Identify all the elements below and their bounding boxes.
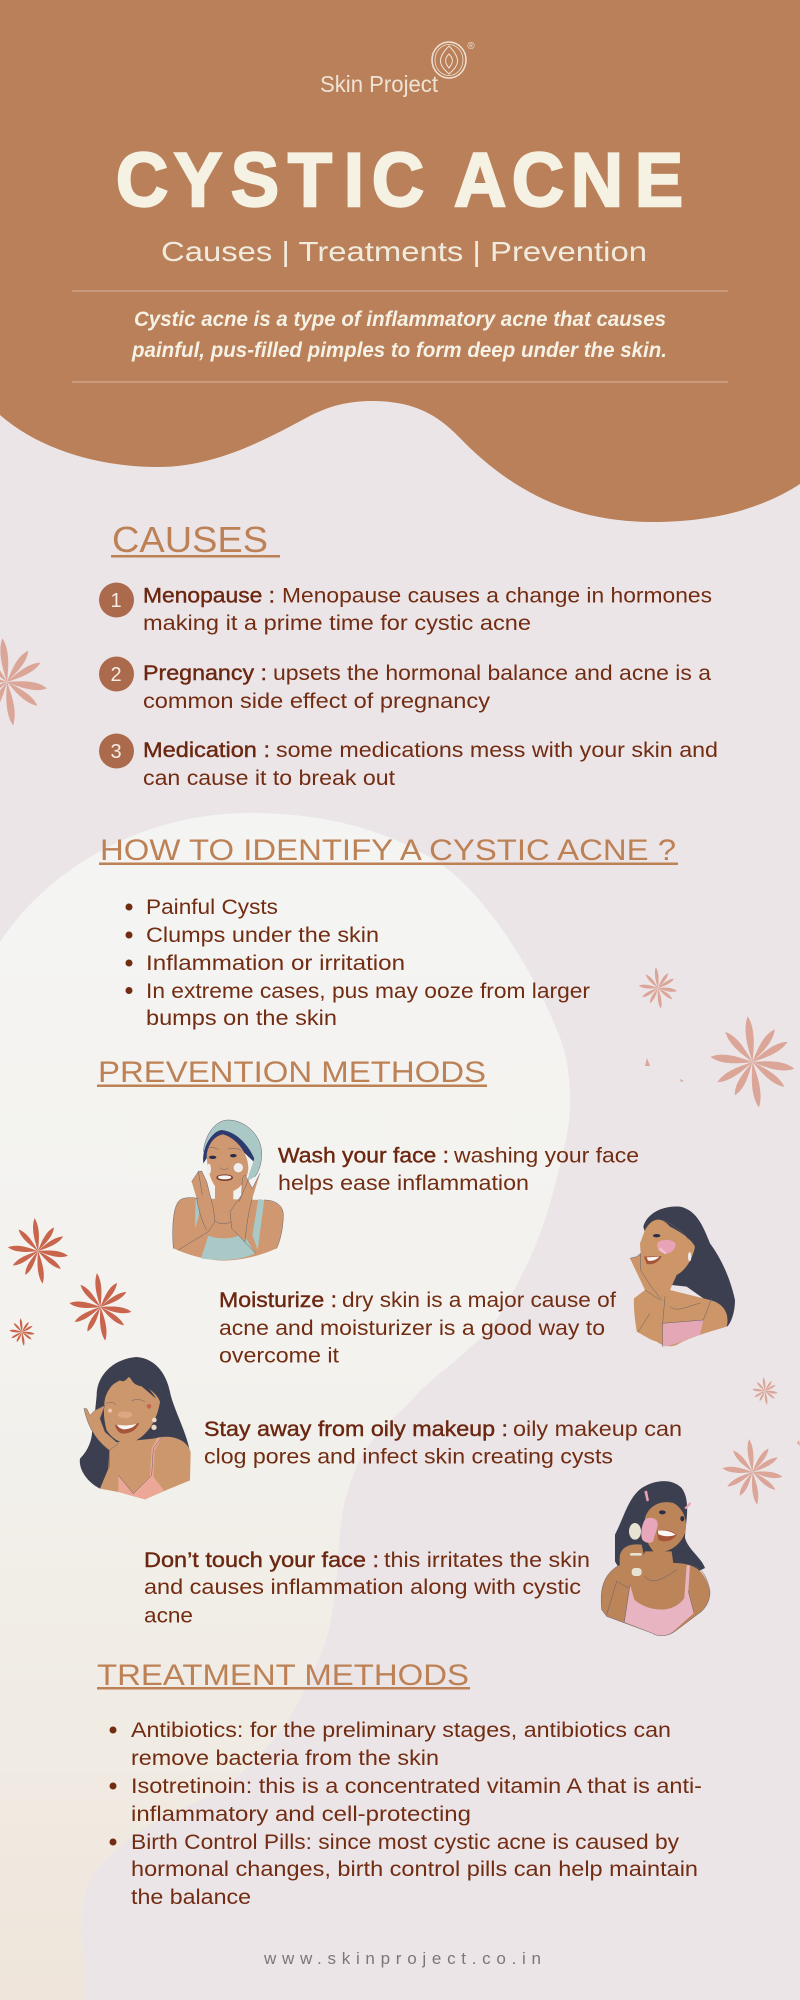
footer website: www.skinproject.co.in [263,1949,541,1968]
moisturize text: dry skin is a major cause of [342,1289,616,1312]
logo: Skin Project: Skin Project [320,71,439,97]
illustration: woman applying pink cream [630,1206,735,1347]
treatment bullet list: inflammatory and cell-protecting [131,1803,471,1826]
flower: pink right [722,1439,783,1505]
don't touch your face text: Don’t touch your face : [144,1549,379,1572]
flower: small pink [639,967,677,1009]
wash your face text: helps ease inflammation [278,1172,529,1195]
treatment bullet list [110,1719,702,1909]
flower: red second [69,1273,132,1341]
title: CYSTIC ACNE [116,137,683,222]
moisturize text [219,1289,616,1368]
cause 2: pregnancy: common side effect of pregnancy [143,690,491,713]
treatment bullet list: remove bacteria from the skin [131,1747,439,1770]
petal specks [645,1058,800,1446]
moisturize text: Moisturize : [219,1289,337,1312]
heading: treatment methods: TREATMENT METHODS [97,1659,469,1692]
header wave panel [0,0,800,522]
don't touch your face text: acne [144,1604,193,1628]
wash your face text: Wash your face : [278,1144,449,1168]
cause 2: pregnancy: Pregnancy : [143,662,267,685]
illustration: woman washing face [173,1120,283,1261]
stay away from oily makeup text [204,1418,682,1468]
don't touch your face text [144,1549,590,1628]
cause 3: medication: 3 [110,741,122,763]
flower: red large left [8,1218,68,1284]
don't touch your face text: and causes inflammation along with cystic [144,1576,581,1599]
heading: prevention methods: PREVENTION METHODS [98,1056,486,1089]
pale background blob [0,813,570,2000]
flower: red small [9,1318,35,1346]
treatment bullet list: Antibiotics: for the preliminary stages, antibiotics can [131,1719,671,1742]
stay away from oily makeup text: oily makeup can [513,1418,682,1441]
illustration: woman winking [80,1357,191,1499]
wash your face text: washing your face [453,1144,639,1168]
cause 2: pregnancy: upsets the hormonal balance and acne is a [273,662,711,685]
identify bullet list: Painful Cysts [146,896,278,919]
cause 1: menopause: making it a prime time for cystic acne [143,612,531,635]
cause 1: menopause: Menopause causes a change in hormones [282,584,712,608]
stay away from oily makeup text: clog pores and infect skin creating cysts [204,1446,613,1468]
stay away from oily makeup text: Stay away from oily makeup : [204,1418,508,1441]
identify bullet list [126,896,590,1030]
treatment bullet list: the balance [131,1886,251,1909]
cause 1: menopause: 1 [110,590,122,612]
subtitle: Causes | Treatments | Prevention [161,236,647,267]
intro text block: Cystic acne is a type of inflammatory acne that causes [134,308,666,331]
wash your face text [278,1144,639,1195]
treatment bullet list: Isotretinoin: this is a concentrated vitamin A that is anti- [131,1775,702,1798]
cause 3: medication: Medication : [143,739,270,762]
treatment bullet list: Birth Control Pills: since most cystic acne is caused by [131,1831,680,1854]
flower: pink small right [752,1377,778,1405]
identify bullet list: Inflammation or irritation [146,952,405,975]
moisturize text: overcome it [219,1344,339,1368]
heading: how to identify: HOW TO IDENTIFY A CYSTIC ACNE ? [100,834,676,867]
logo: Skin Project [320,41,475,97]
moisturize text: acne and moisturizer is a good way to [219,1317,605,1340]
identify bullet list: Clumps under the skin [146,924,379,947]
identify bullet list: In extreme cases, pus may ooze from larger [146,980,590,1003]
logo: Skin Project: ® [467,41,475,52]
cause 1: menopause [99,582,712,635]
cause 3: medication [99,734,718,790]
cause 1: menopause: Menopause : [143,584,275,608]
identify bullet list: bumps on the skin [146,1007,337,1030]
flower: left pink [0,638,48,726]
treatment bullet list: hormonal changes, birth control pills can help maintain [131,1858,698,1881]
intro text block [72,290,728,383]
cause 3: medication: some medications mess with your skin and [276,739,718,762]
heading: causes: CAUSES [112,519,268,560]
don't touch your face text: this irritates the skin [384,1549,590,1572]
flower: large pink [710,1016,795,1108]
illustration: woman with face roller [601,1481,710,1636]
intro text block: painful, pus-filled pimples to form deep under the skin. [131,339,667,362]
cause 2: pregnancy [99,656,711,713]
cause 3: medication: can cause it to break out [143,767,395,790]
cause 2: pregnancy: 2 [110,664,122,686]
